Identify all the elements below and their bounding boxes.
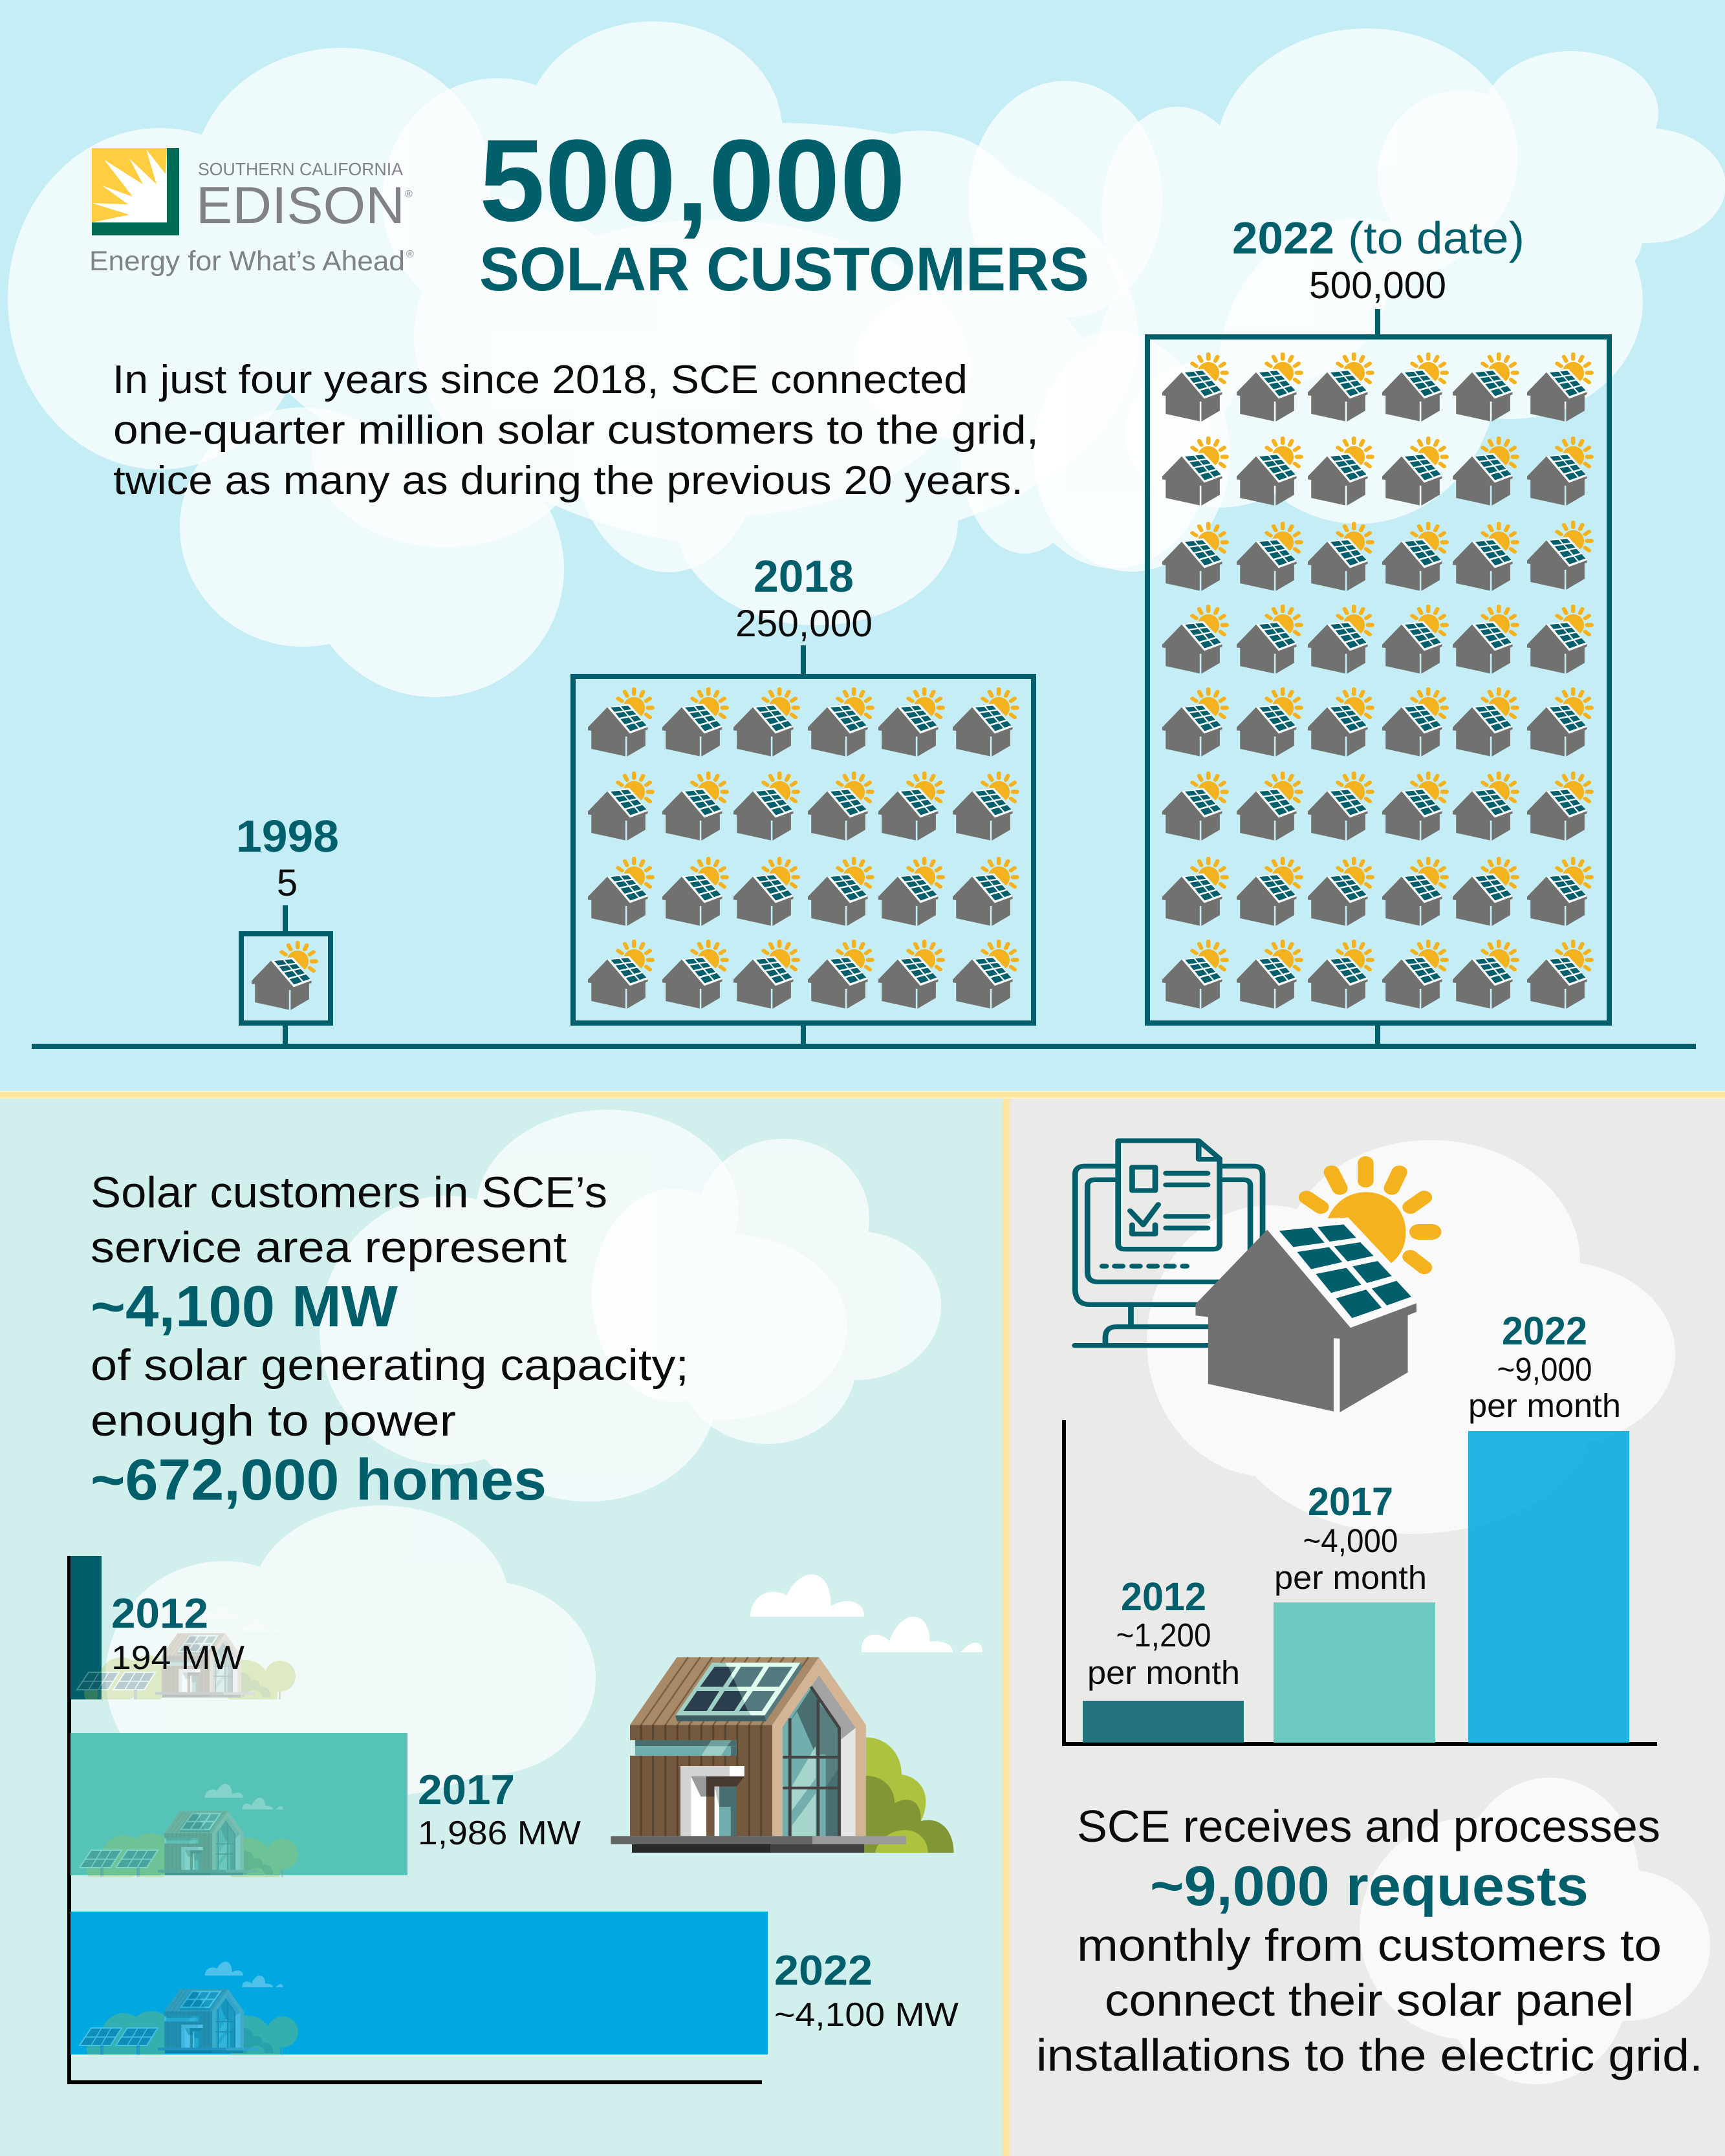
requests label 2017: ~4,000 <box>1303 1522 1398 1559</box>
tagline registered mark: ® <box>406 249 414 260</box>
faded scene on bar 2022 <box>80 1962 298 2066</box>
panel: requests background <box>1008 1099 1725 2156</box>
label 2017: 2017 <box>418 1766 515 1813</box>
panel: generating capacity background <box>0 1099 1004 2156</box>
bar chart: capacity in MW <box>69 1556 959 2082</box>
capacity text line 2: service area represent <box>91 1223 567 1272</box>
capacity text block <box>91 1168 689 1513</box>
1998 box <box>241 934 331 1023</box>
logo name: EDISON <box>196 177 405 235</box>
2022 house icons <box>1162 354 1591 1009</box>
requests label 2017 <box>1274 1480 1427 1596</box>
title subtitle: SOLAR CUSTOMERS <box>479 235 1089 304</box>
logo wordmark: SOUTHERN CALIFORNIA <box>198 159 403 179</box>
title <box>479 116 1089 304</box>
value 2012: 194 MW <box>111 1639 244 1677</box>
bar 2022 <box>71 1912 768 2054</box>
requests label 2012: 2012 <box>1121 1575 1206 1619</box>
intro text block <box>113 358 1039 503</box>
label 2012: 2012 <box>111 1590 208 1637</box>
column: 2022 <box>1147 213 1609 1046</box>
logo tagline: Energy for What’s Ahead <box>89 246 405 277</box>
requests text block <box>1036 1801 1703 2080</box>
timeline axis <box>32 1044 1696 1049</box>
requests bar 2017 <box>1274 1602 1435 1743</box>
2018 year label: 2018 <box>754 551 854 601</box>
faded scene on bar 2017 <box>80 1784 298 1888</box>
column: 2018 <box>573 551 1034 1046</box>
requests label 2017: 2017 <box>1308 1480 1393 1524</box>
2022 to date label: (to date) <box>1348 213 1524 263</box>
requests text line 1: SCE receives and processes <box>1077 1801 1660 1851</box>
background clouds lower left <box>105 1110 941 1798</box>
1998 count: 5 <box>277 862 298 904</box>
bar chart: monthly requests <box>1064 1309 1657 1744</box>
icon: monitor and document <box>1075 1141 1263 1346</box>
logo: Southern California Edison <box>89 148 414 277</box>
2018 box <box>573 676 1034 1023</box>
capacity text line 4: enough to power <box>91 1396 456 1445</box>
requests bar 2022 <box>1468 1431 1629 1743</box>
bar 2012 <box>71 1556 102 1699</box>
title number: 500,000 <box>479 116 906 246</box>
requests figure: ~9,000 requests <box>1150 1855 1589 1917</box>
requests label 2022: per month <box>1468 1387 1621 1424</box>
requests label 2022 <box>1468 1309 1621 1424</box>
capacity text line 3: of solar generating capacity; <box>91 1341 689 1390</box>
intro text block: In just four years since 2018, SCE connected <box>113 358 968 402</box>
intro text block: twice as many as during the previous 20 years. <box>113 458 1023 503</box>
icon: house with solar <box>252 943 316 1010</box>
background clouds top <box>8 21 1725 697</box>
faded scene on bar 2012 <box>77 1606 296 1710</box>
capacity figure: ~4,100 MW <box>91 1275 398 1339</box>
panel: top solar customers background <box>0 0 1725 1092</box>
requests label 2012: per month <box>1087 1654 1240 1691</box>
requests text line 2: monthly from customers to <box>1077 1920 1662 1970</box>
requests bar 2012 <box>1083 1701 1244 1743</box>
2022 year label: 2022 <box>1232 213 1334 263</box>
logo registered mark: ® <box>405 189 413 200</box>
icon: solar house <box>1195 1163 1432 1412</box>
value 2022: ~4,100 MW <box>774 1996 959 2034</box>
intro text block: one-quarter million solar customers to the grid, <box>113 408 1039 453</box>
requests axes <box>1064 1420 1657 1744</box>
2022 box <box>1147 337 1609 1023</box>
illustration: house with solar panels <box>611 1575 982 1853</box>
bar chart axes <box>69 1556 762 2082</box>
capacity text line 1: Solar customers in SCE’s <box>91 1168 607 1217</box>
requests text line 3: connect their solar panel <box>1105 1975 1634 2025</box>
icon: monitor with application and solar house <box>1075 1141 1432 1412</box>
background clouds lower right <box>1147 1140 1710 2084</box>
requests label 2022: 2022 <box>1502 1309 1587 1353</box>
requests label 2012: ~1,200 <box>1116 1617 1211 1654</box>
value 2017: 1,986 MW <box>418 1815 581 1852</box>
logo mark <box>92 148 179 235</box>
label 2022: 2022 <box>774 1946 873 1994</box>
2018 house icons <box>588 689 1017 1009</box>
requests label 2022: ~9,000 <box>1497 1351 1592 1388</box>
1998 year label: 1998 <box>236 811 339 861</box>
2018 count: 250,000 <box>735 603 873 645</box>
2022 count: 500,000 <box>1309 264 1446 307</box>
bar 2017 <box>71 1733 407 1875</box>
requests text line 4: installations to the electric grid. <box>1036 2030 1703 2080</box>
requests label 2012 <box>1087 1575 1240 1691</box>
column: 1998 <box>236 811 339 1046</box>
homes figure: ~672,000 homes <box>91 1448 547 1513</box>
requests label 2017: per month <box>1274 1559 1427 1596</box>
